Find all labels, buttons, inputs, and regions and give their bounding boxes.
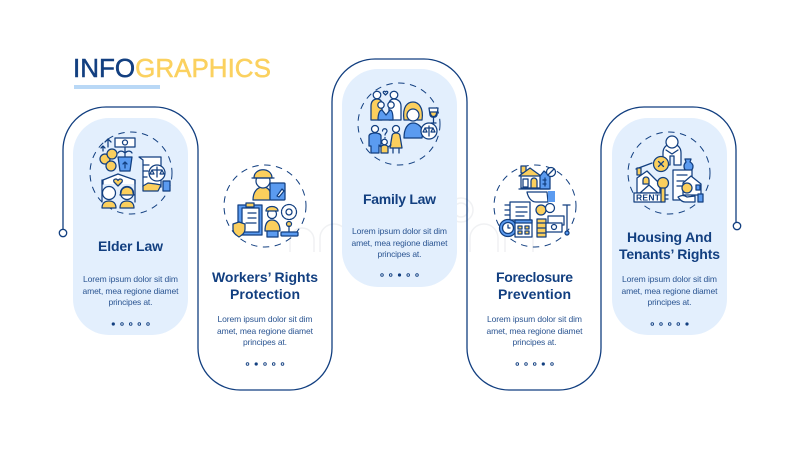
text: workers rights: Lorem ipsum dolor sit dim (218, 314, 312, 324)
connecting outline (63, 59, 736, 390)
text: family law: Lorem ipsum dolor sit dim (352, 226, 447, 236)
heading: housing and tenants rights (619, 229, 720, 262)
icon: housing and tenants rights: RENT (636, 192, 661, 202)
text: housing and tenants rights (622, 274, 718, 307)
text: workers rights: amet, mea regione diamet (217, 326, 314, 336)
heading: foreclosure prevention: Prevention (498, 286, 571, 302)
text: foreclosure prevention: amet, mea regione diamet (486, 326, 583, 336)
text: housing and tenants rights: amet, mea regione diamet (622, 286, 718, 296)
text: housing and tenants rights: principes at. (648, 297, 692, 307)
title text: INFOGRAPHICS (73, 53, 271, 83)
heading: workers rights: Protection (230, 286, 300, 302)
heading: housing and tenants rights: Housing And (627, 229, 712, 245)
heading: family law: Family Law (363, 191, 436, 207)
heading: foreclosure prevention: Foreclosure (496, 269, 573, 285)
heading: workers rights (212, 269, 318, 302)
pagination: workers rights (246, 362, 284, 366)
text: workers rights (217, 314, 314, 347)
text: elder law: Lorem ipsum dolor sit dim (83, 274, 178, 284)
left end node (59, 229, 67, 237)
heading: workers rights: Workers’ Rights (212, 269, 318, 285)
right end node (733, 222, 741, 230)
pagination: elder law (112, 322, 149, 326)
faint watermark (290, 198, 533, 252)
pagination: family law (381, 273, 418, 277)
text: workers rights: principes at. (243, 337, 287, 347)
heading: housing and tenants rights: Tenants’ Rights (619, 246, 720, 262)
icon: foreclosure prevention (494, 165, 576, 247)
text: foreclosure prevention: Lorem ipsum dolor sit dim (487, 314, 582, 324)
text: elder law (82, 274, 179, 307)
heading: elder law: Elder Law (98, 238, 163, 254)
text: elder law: amet, mea regione diamet (82, 286, 179, 296)
icon: family law (358, 83, 440, 165)
light panel: family law (342, 69, 457, 287)
text: family law (352, 226, 448, 259)
heading: foreclosure prevention (496, 269, 573, 302)
text: elder law: principes at. (108, 297, 152, 307)
icon: workers rights (224, 165, 306, 247)
text: family law: amet, mea regione diamet (352, 238, 448, 248)
pagination: foreclosure prevention (516, 362, 553, 366)
title underline (74, 85, 160, 89)
text: foreclosure prevention (486, 314, 583, 347)
title (73, 53, 271, 89)
text: housing and tenants rights: Lorem ipsum dolor sit dim (622, 274, 717, 284)
light panel: housing and tenants rights (612, 118, 727, 335)
light panel: elder law (73, 118, 188, 335)
icon: housing and tenants rights (628, 132, 710, 214)
text: family law: principes at. (378, 249, 422, 259)
pagination: housing and tenants rights (651, 322, 689, 326)
text: foreclosure prevention: principes at. (512, 337, 556, 347)
icon: elder law (90, 132, 172, 214)
